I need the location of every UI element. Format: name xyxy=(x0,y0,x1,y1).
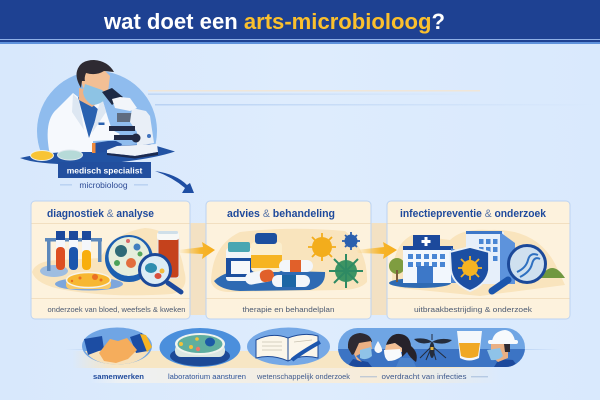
bottom labels xyxy=(93,372,488,381)
title: wat doet een arts-microbioloog? xyxy=(103,9,445,34)
agar dish xyxy=(66,280,111,289)
faint decorative lines xyxy=(148,90,600,106)
bottle with teal cap xyxy=(226,242,253,281)
lapels xyxy=(72,94,106,133)
panel: infectiepreventie & onderzoek xyxy=(387,201,570,319)
icon: laboratory dish xyxy=(160,328,240,367)
label: microbioloog xyxy=(60,180,148,190)
face xyxy=(81,68,110,96)
specimen jar xyxy=(158,236,179,278)
shield xyxy=(450,247,489,291)
magnifier xyxy=(168,283,181,292)
bottom labels: overdracht van infecties xyxy=(382,372,467,381)
petri dishes xyxy=(30,150,54,160)
water drop xyxy=(374,341,382,353)
neck xyxy=(79,88,99,107)
surgical mask xyxy=(83,84,107,105)
icon group: transmission of infections xyxy=(338,328,525,367)
bottom strip band xyxy=(65,349,560,383)
label: medisch specialist: medisch specialist xyxy=(67,166,142,176)
hair xyxy=(76,60,114,88)
label: medisch specialist xyxy=(58,162,151,178)
glove xyxy=(95,141,122,153)
label: microbioloog: microbioloog xyxy=(79,180,128,190)
arrow: diagnostiek to advies xyxy=(178,242,215,259)
connecting band between panels xyxy=(188,223,388,315)
blue circle backdrop xyxy=(37,72,157,152)
bottle with blue cap xyxy=(251,233,282,272)
header banner xyxy=(0,0,600,44)
person 2 xyxy=(384,334,417,367)
illustration: tubes, dishes, magnifier xyxy=(32,228,186,295)
panel: advies & behandeling xyxy=(206,201,371,319)
icon: handshake xyxy=(82,328,152,364)
lab coat xyxy=(48,93,120,152)
back building xyxy=(466,232,504,284)
dark blue table ellipse xyxy=(20,144,175,164)
curved arrow to panels xyxy=(155,171,194,193)
heading: diagnostiek & analyse xyxy=(47,208,154,220)
trees xyxy=(389,258,405,274)
viruses xyxy=(312,237,332,257)
bottom labels: wetenschappelijk onderzoek xyxy=(256,372,350,381)
person 1 xyxy=(347,333,372,367)
mosquito xyxy=(414,334,452,360)
caption: uitbraakbestrijding & onderzoek xyxy=(414,305,532,314)
test tubes xyxy=(56,232,65,270)
person 3 xyxy=(487,330,518,367)
icon: book and dna xyxy=(247,328,330,366)
capsules xyxy=(244,260,313,287)
heading: infectiepreventie & onderzoek xyxy=(400,208,547,220)
bottom labels: laboratorium aansturen xyxy=(168,372,246,381)
caption: therapie en behandelplan xyxy=(242,305,334,314)
coat pocket xyxy=(98,122,104,125)
illustration: medicine and viruses xyxy=(211,229,367,292)
microscope xyxy=(102,88,158,158)
bottom labels: samenwerken xyxy=(93,372,144,381)
magnifier xyxy=(492,280,508,291)
illustration: hospital, shield, magnifier xyxy=(389,230,565,296)
illustration: scientist at microscope xyxy=(20,60,175,164)
shirt xyxy=(78,97,99,138)
hospital xyxy=(413,235,440,248)
caption: onderzoek van bloed, weefsels & kweken xyxy=(48,305,186,314)
culture dish xyxy=(105,235,153,282)
heading: advies & behandeling xyxy=(227,208,335,220)
arrow: advies to infectiepreventie xyxy=(356,242,397,259)
cup xyxy=(457,331,482,360)
panel: diagnostiek & analyse xyxy=(31,201,190,319)
